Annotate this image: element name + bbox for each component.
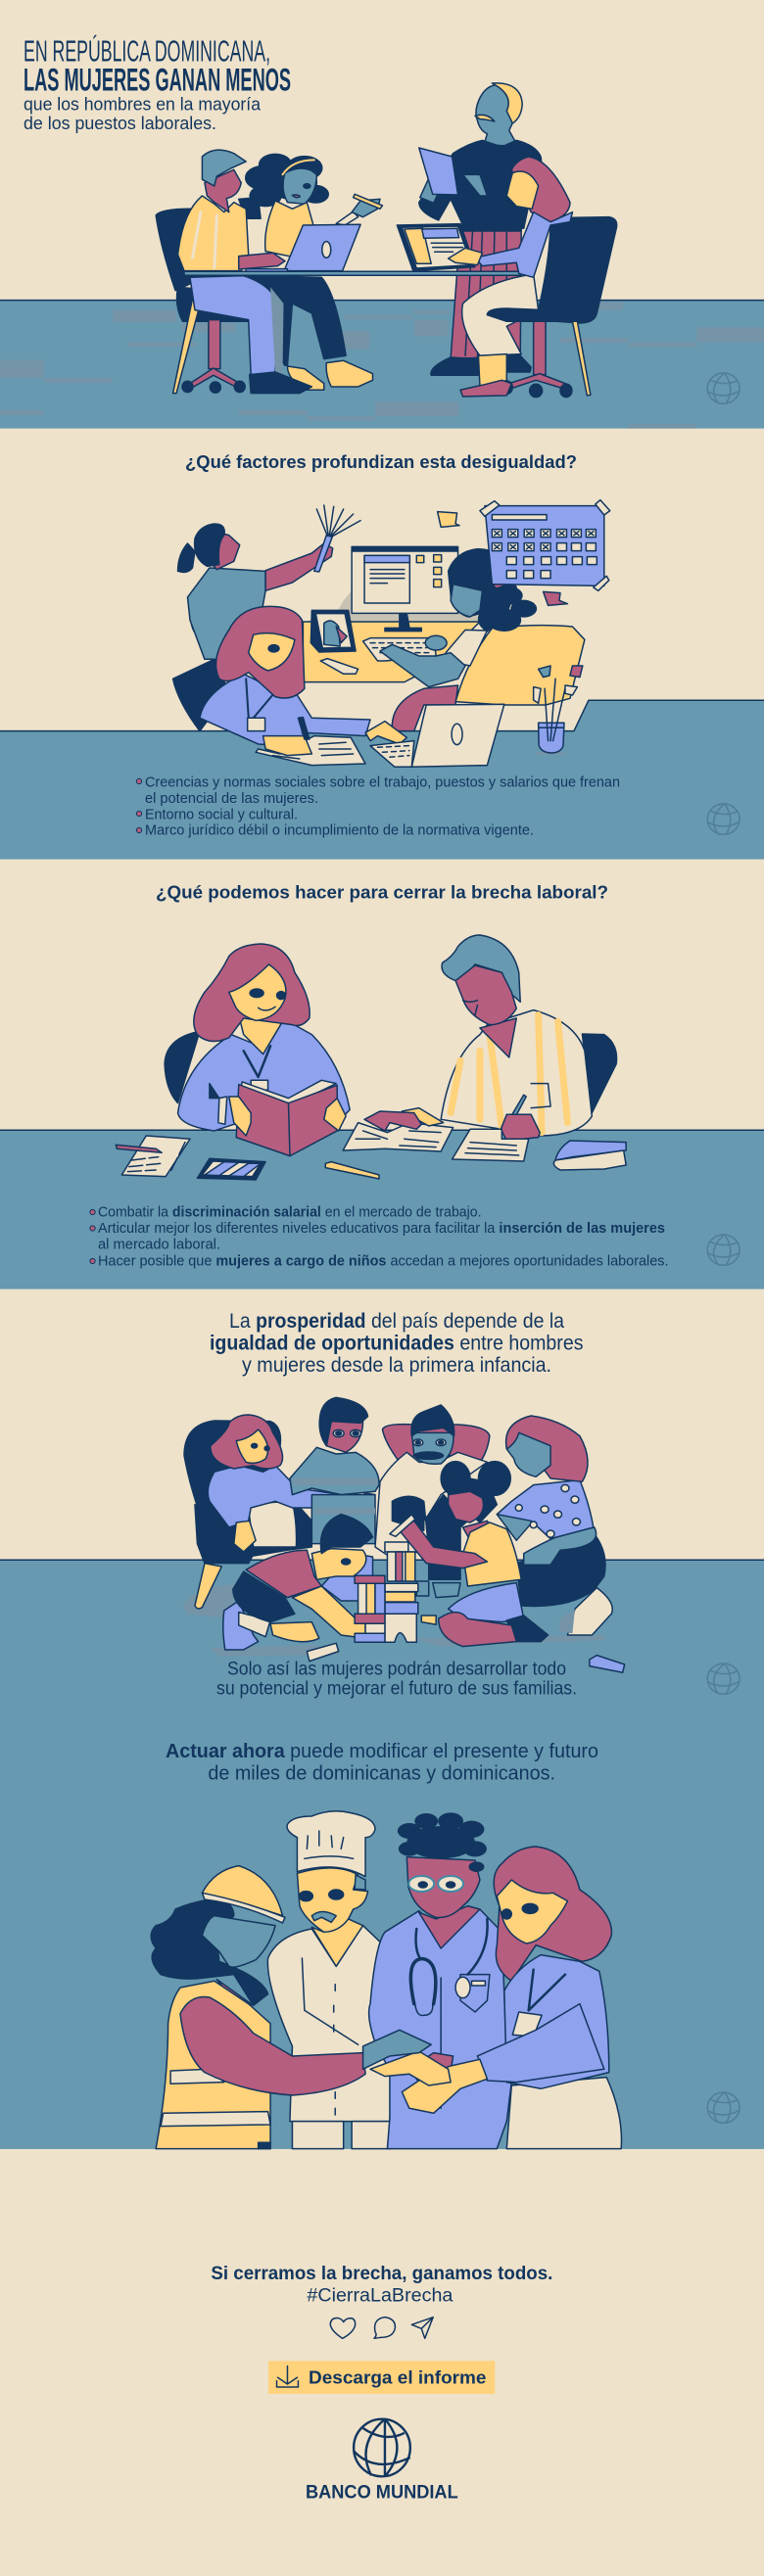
- floor: panel 2: [0, 700, 764, 860]
- floor: panel 1: [0, 301, 764, 429]
- illustration: boy with blocks: [223, 1515, 373, 1650]
- heading: factors: ¿Qué factores profundizan esta desigualdad?: [185, 452, 577, 472]
- logo: Banco Mundial: [306, 2419, 458, 2504]
- title text: [24, 34, 291, 133]
- statement: prosperity: igualdad de oportunidades entre hombres: [210, 1333, 584, 1355]
- illustration: construction worker: [151, 1866, 365, 2149]
- statement: act now: Actuar ahora puede modificar el presente y futuro: [166, 1741, 598, 1762]
- logo mark: panel 5: [707, 2092, 740, 2123]
- title text: de los puestos laborales.: [24, 114, 216, 133]
- logo mark: panel 1: [707, 373, 740, 403]
- list: factors: Entorno social y cultural.: [145, 806, 298, 822]
- floor: panel 3: [0, 1130, 764, 1289]
- panel: workers joining hands: [151, 1741, 740, 2149]
- title text: LAS MUJERES GANAN MENOS: [24, 63, 291, 98]
- list: factors: Marco jurídico débil o incumplimiento de la normativa vigente.: [145, 822, 534, 839]
- logo mark: panel 2: [707, 804, 740, 834]
- statement: potential: Solo así las mujeres podrán desarrollar todo: [227, 1660, 566, 1680]
- list: factors: el potencial de las mujeres.: [145, 790, 318, 807]
- statement: potential: su potencial y mejorar el futuro de sus familias.: [216, 1679, 577, 1700]
- statement: prosperity: y mujeres desde la primera infancia.: [242, 1354, 551, 1377]
- logo mark: panel 3: [707, 1235, 740, 1265]
- heading: actions: ¿Qué podemos hacer para cerrar la brecha laboral?: [156, 882, 608, 902]
- illustration: man with mustache: [375, 1405, 490, 1598]
- closing text: [211, 2264, 552, 2307]
- button: download report: [268, 2361, 495, 2394]
- illustration: desk items: [116, 1136, 626, 1180]
- illustration: wall calendar and notes: [438, 500, 610, 605]
- list: actions: al mercado laboral.: [98, 1237, 220, 1253]
- statement: prosperity: La prosperidad del país depende de la: [229, 1310, 564, 1333]
- panel: actions: [0, 882, 764, 1289]
- icon: send: [411, 2318, 433, 2338]
- illustration: chef: [267, 1811, 392, 2149]
- list: actions: Combatir la discriminación salarial en el mercado de trabajo.: [98, 1203, 482, 1220]
- illustration: joined hands: [363, 2030, 487, 2113]
- list: actions: [90, 1203, 668, 1269]
- icon: comment: [374, 2318, 395, 2338]
- icon: download: [277, 2366, 298, 2387]
- illustration: seated man and woman at laptop: [156, 150, 382, 394]
- illustration: girl: [390, 1462, 549, 1647]
- button: download report: Descarga el informe: [309, 2366, 486, 2387]
- illustration: man in teal sweater: [290, 1397, 379, 1544]
- illustration: man writing: [343, 935, 617, 1161]
- illustration: woman dusting: [178, 505, 360, 659]
- panel: closing call to action: [211, 2264, 552, 2504]
- closing text: Si cerramos la brecha, ganamos todos.: [211, 2264, 552, 2284]
- title text: EN REPÚBLICA DOMINICANA,: [24, 34, 270, 69]
- closing text: #CierraLaBrecha: [307, 2286, 454, 2307]
- list: factors: Creencias y normas sociales sobre el trabajo, puestos y salarios que frenan: [145, 773, 620, 790]
- illustration: standing man with tablet: [419, 83, 542, 375]
- statement: act now: [166, 1741, 598, 1784]
- illustration: woman reading: [165, 944, 350, 1156]
- illustration: block tower: [307, 1542, 625, 1672]
- logo mark: panel 4: [707, 1663, 740, 1694]
- statement: act now: de miles de dominicanas y dominicanos.: [208, 1762, 555, 1784]
- illustration: grandmother in armchair: [184, 1415, 375, 1609]
- illustration: woman in polka dots: [497, 1416, 612, 1635]
- list: actions: Articular mejor los diferentes niveles educativos para facilitar la inserción de las mujeres: [98, 1220, 665, 1237]
- panel: title and office meeting: [0, 34, 764, 429]
- statement: potential: [216, 1660, 577, 1700]
- list: actions: Hacer posible que mujeres a cargo de niños accedan a mejores oportunidades laborales.: [98, 1252, 668, 1269]
- illustration: woman at open laptop: [184, 157, 617, 398]
- illustration: desk with monitor and seated woman: [303, 546, 585, 731]
- panel: factors: [0, 452, 764, 860]
- illustration: doctor: [369, 1812, 511, 2149]
- title text: que los hombres en la mayoría: [24, 94, 262, 114]
- logo: Banco Mundial: BANCO MUNDIAL: [306, 2483, 458, 2504]
- icon: heart: [330, 2318, 356, 2338]
- statement: prosperity: [210, 1310, 584, 1377]
- illustration: woman writing with laptop: [173, 606, 583, 767]
- illustration: woman with badge: [477, 1847, 621, 2149]
- list: factors: [136, 773, 620, 839]
- panel: family playing: [0, 1310, 764, 2149]
- floor: panels 4 and 5: [0, 1560, 764, 2149]
